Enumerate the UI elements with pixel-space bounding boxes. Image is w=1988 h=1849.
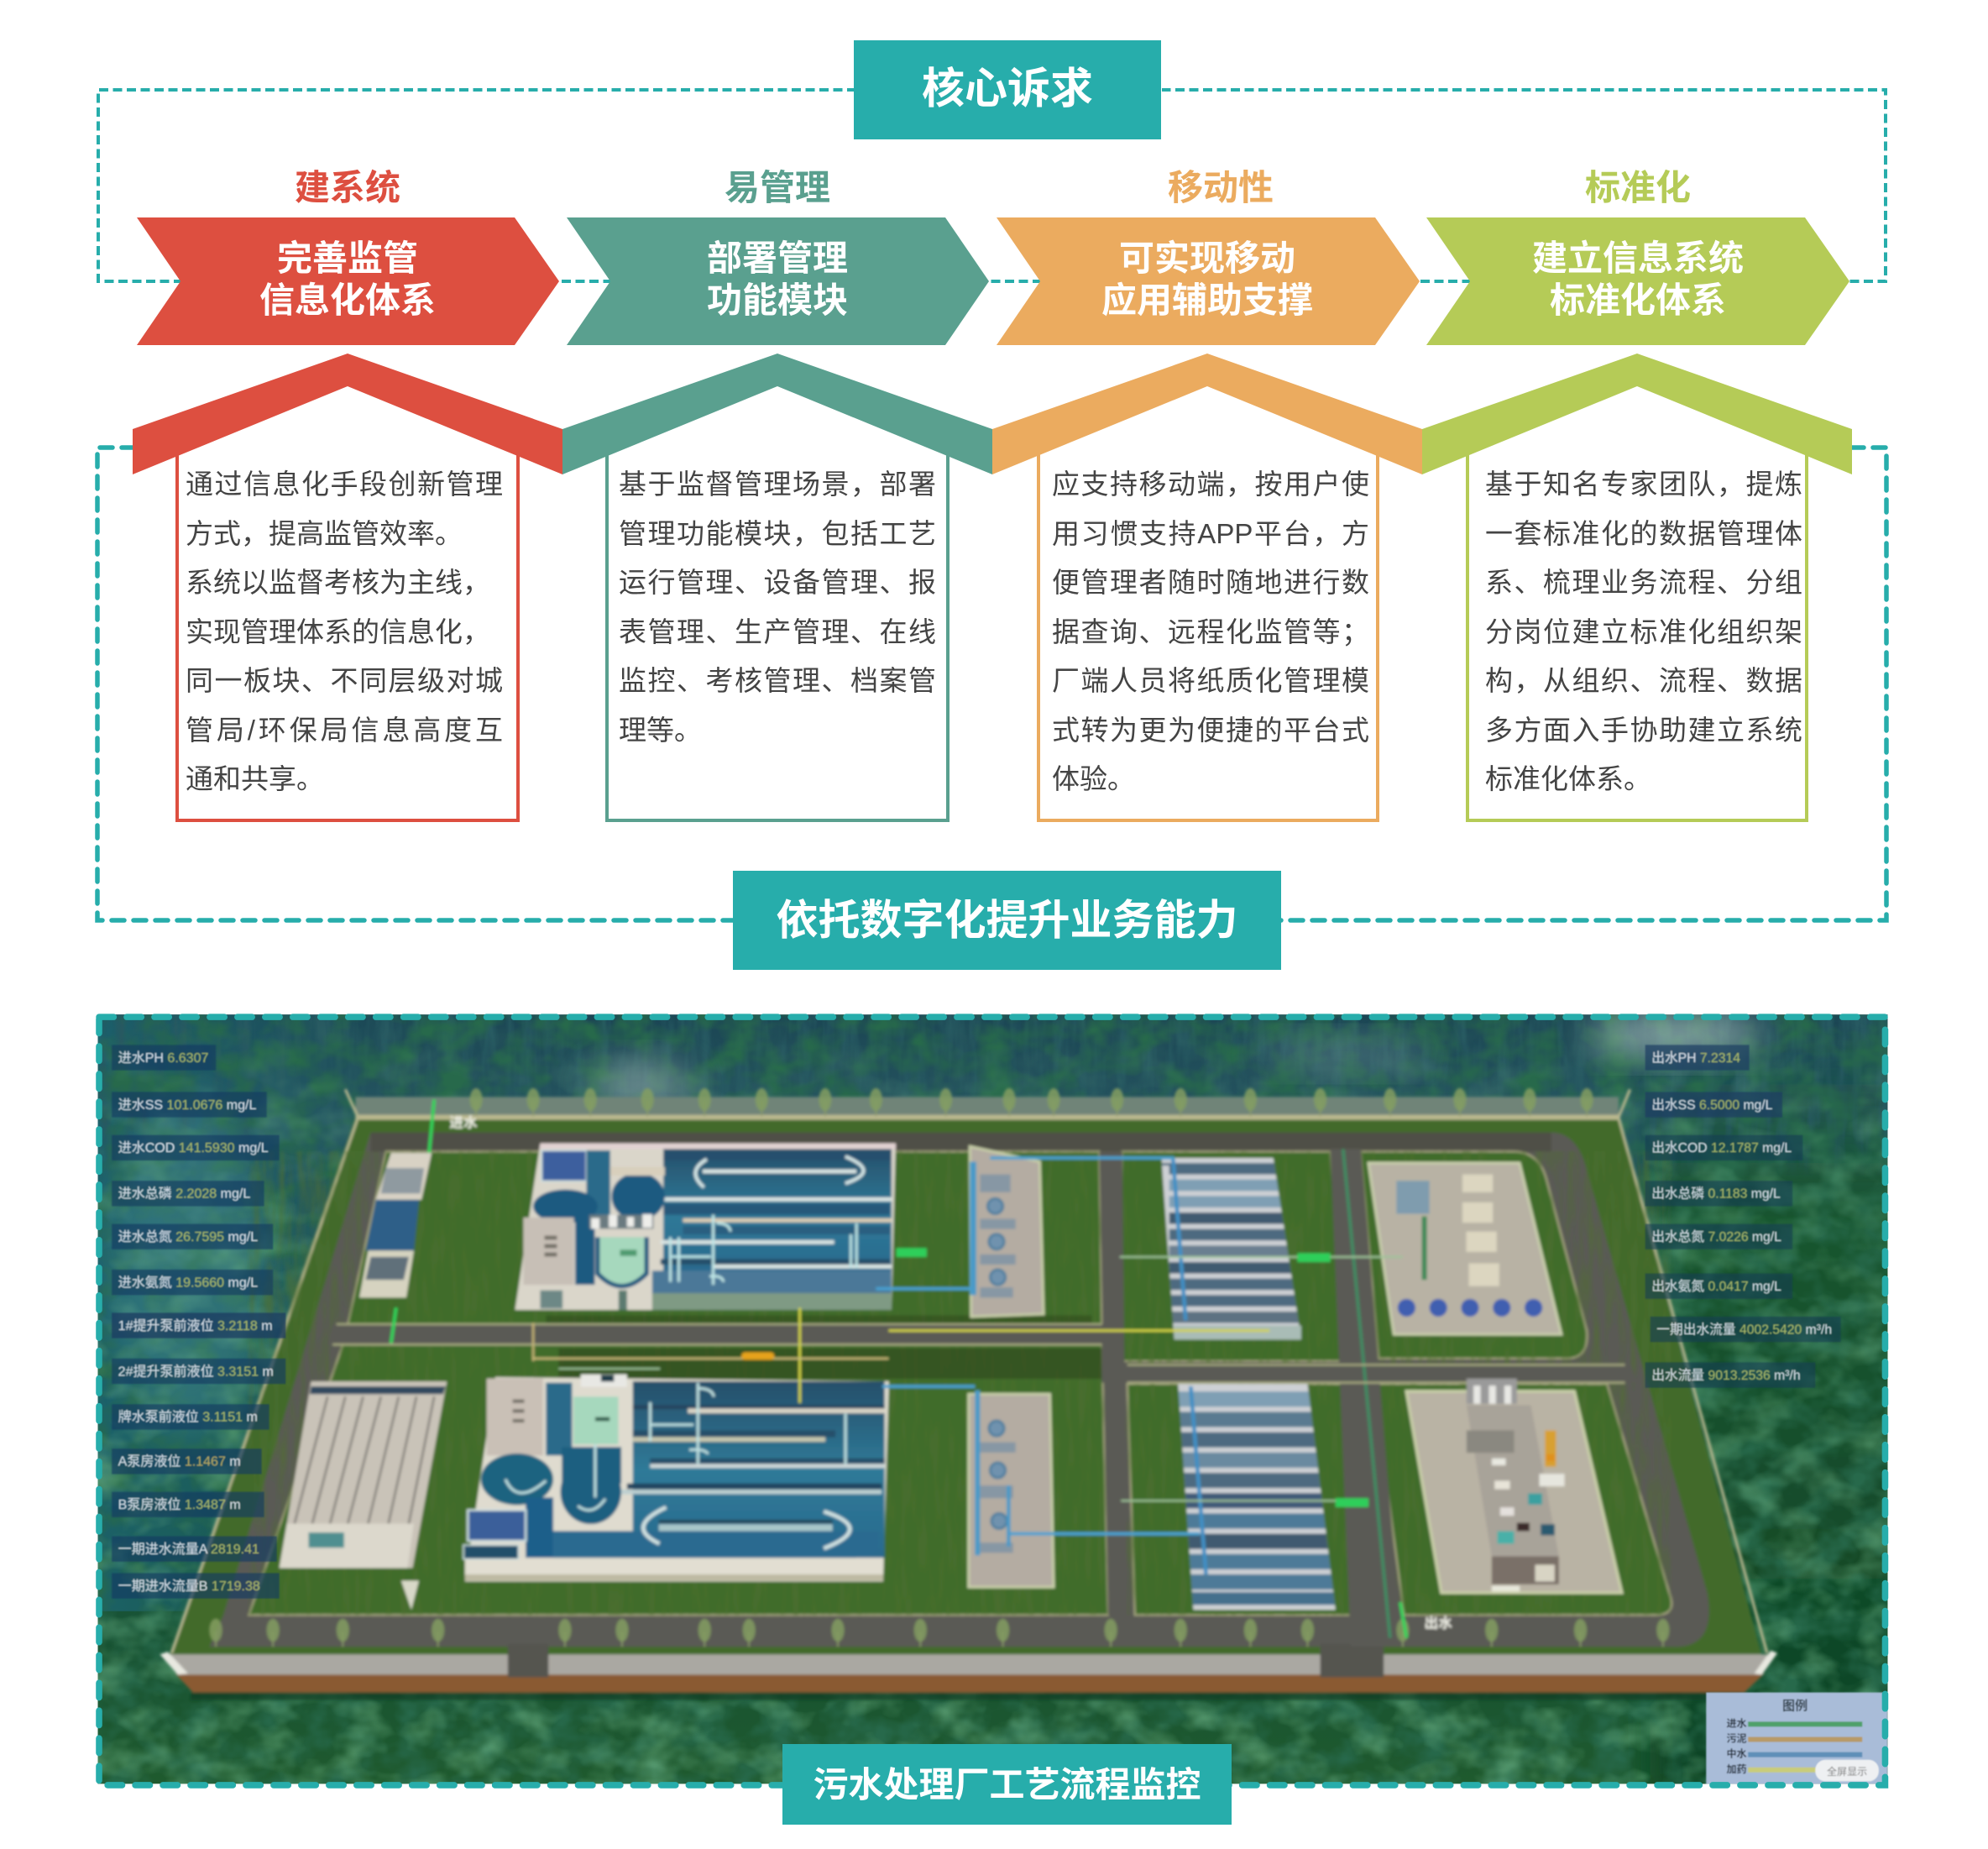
chevron text: green: 功能模块 [707,280,848,320]
upper aeration tank [515,1144,896,1310]
text block: mobility: 据查询、远程化监管等； [1052,616,1369,647]
text block: easy management: 表管理、生产管理、在线 [619,616,936,647]
left sensor readings: 进水SS 101.0676 mg/L [118,1097,257,1113]
chevron text: lime: 建立信息系统 [1532,238,1744,278]
text block: build system: 实现管理体系的信息化， [186,616,490,647]
text block: easy management: 监控、考核管理、档案管 [619,665,936,696]
text block: standardization: 一套标准化的数据管理体 [1485,517,1802,549]
lower sedimentation tank [1174,1384,1339,1610]
orange flow arrow [741,1352,774,1359]
wastewater plant site [160,1088,1777,1700]
text block: mobility: 应支持移动端，按用户使 [1052,469,1369,500]
text block: standardization: 分岗位建立标准化组织架 [1485,616,1802,647]
panel: mobility box [1037,445,1379,822]
chevron: green [567,217,989,345]
left sensor readings: A泵房液位 1.1467 m [118,1454,241,1469]
roof: red [133,354,562,474]
text block: easy management [619,469,936,746]
legend: 图例 [1782,1700,1808,1714]
photo dashed border [99,1017,1885,1785]
chevron: orange [997,217,1420,345]
text block: mobility [1052,469,1369,794]
left sensor readings: 一期进水流量A 2819.41 [118,1542,259,1557]
legend: 污泥 [1726,1732,1747,1745]
capability dashed frame [95,445,1889,923]
left sensor readings: 进水PH 6.6307 [118,1050,208,1066]
chevron text: green: 部署管理 [707,238,848,278]
chevron text: orange: 可实现移动 [1119,238,1295,278]
chevron text: green [707,238,848,320]
lower process block [1406,1379,1622,1593]
core demands dashed frame [97,88,1887,283]
panel: standardization box [1466,445,1808,822]
roof: lime [1422,354,1852,474]
chevron text: lime [1532,238,1744,320]
text block: build system: 通过信息化手段创新管理 [186,469,503,500]
upper equipment strip [970,1146,1044,1317]
legend: 加药 [1726,1763,1747,1775]
road network [210,1133,1709,1647]
right sensor readings: 出水SS 6.5000 mg/L [1651,1097,1773,1113]
right sensor readings: 出水流量 9013.2536 m³/h [1651,1368,1801,1383]
panel: build system box [175,445,520,822]
left sensor readings: 牌水泵前液位 3.1151 m [118,1410,258,1425]
text block: standardization: 多方面入手协助建立系统 [1485,714,1802,746]
right sensor readings: 一期出水流量 4002.5420 m³/h [1656,1322,1832,1337]
text block: standardization: 基于知名专家团队，提炼 [1485,469,1802,500]
text block: build system: 同一板块、不同层级对城 [186,665,503,696]
banner: digital capability: 依托数字化提升业务能力 [776,897,1237,944]
left sensor readings [112,1045,285,1599]
banner: process monitoring caption [782,1744,1232,1825]
left sensor readings: 1#提升泵前液位 3.2118 m [118,1318,273,1333]
text block: standardization: 标准化体系。 [1485,763,1651,794]
legend: 全屏显示 [1827,1765,1867,1778]
inflow label: 进水 [449,1115,478,1131]
chevron text: lime: 标准化体系 [1550,280,1726,320]
small pretreatment buildings [359,1153,432,1297]
chevron text: red: 信息化体系 [259,280,436,320]
chevron text: orange [1101,238,1313,320]
chevron text: red [259,238,436,320]
process monitoring photo panel [96,1014,1889,1789]
ground [169,1118,1762,1657]
grass shading [248,1151,1671,1615]
banner: process monitoring caption: 污水处理厂工艺流程监控 [813,1765,1201,1804]
left sensor readings: 进水COD 141.5930 mg/L [118,1140,269,1155]
right sensor readings: 出水氨氮 0.0417 mg/L [1651,1279,1781,1294]
text block: build system: 管局/环保局信息高度互 [186,714,503,746]
roof: orange [992,354,1422,474]
upper sedimentation tank [1159,1155,1304,1342]
green flow markers [897,1248,1368,1507]
text block: easy management: 基于监督管理场景，部署 [619,469,936,500]
right sensor readings [1645,1045,1841,1388]
title: core demands [854,40,1161,139]
chevrons and roof shapes [133,217,1852,474]
left sensor readings: B泵房液位 1.3487 m [118,1497,241,1512]
forest background [97,1014,1943,1803]
legend: 进水 [1726,1716,1747,1729]
grass cells [248,1151,1671,1615]
outflow label: 出水 [1425,1615,1452,1631]
text block: mobility: 体验。 [1052,763,1135,794]
text block: standardization: 系、梳理业务流程、分组 [1485,567,1802,598]
banner: digital capability [733,871,1281,970]
right sensor readings: 出水COD 12.1787 mg/L [1651,1140,1792,1155]
text block: build system: 方式，提高监管效率。 [186,517,463,549]
pipelines [391,1099,1406,1638]
text block: build system: 通和共享。 [186,763,324,794]
chevron text: red: 完善监管 [277,238,418,278]
text block: mobility: 便管理者随时随地进行数 [1052,567,1369,598]
chevron: lime [1426,217,1849,345]
title: core demands: 核心诉求 [922,65,1093,113]
chevron: red [137,217,559,345]
text block: build system: 系统以监督考核为主线， [186,567,490,598]
right sensor readings: 出水PH 7.2314 [1651,1050,1740,1066]
connecting roads [1100,1345,1105,1365]
fence back wall [355,1097,1619,1118]
text block: standardization [1485,469,1802,794]
left sensor readings: 进水氨氮 19.5660 mg/L [118,1275,258,1290]
upper power block [1368,1163,1562,1334]
left sensor readings: 进水总磷 2.2028 mg/L [118,1186,250,1202]
lower left warehouse [280,1381,447,1610]
left sensor readings: 2#提升泵前液位 3.3151 m [118,1364,274,1379]
text block: easy management: 管理功能模块，包括工艺 [619,517,936,549]
perimeter trees [210,1088,1669,1647]
text block: easy management: 理等。 [619,714,702,746]
text block: build system [186,469,503,794]
legend: 中水 [1726,1747,1747,1760]
heading: build system: 建系统 [295,168,400,207]
roof: green [562,354,992,474]
heading: mobility: 移动性 [1168,168,1274,207]
right sensor readings: 出水总磷 0.1183 mg/L [1651,1186,1781,1202]
left sensor readings: 一期进水流量B 1719.38 [118,1579,260,1594]
right sensor readings: 出水总氮 7.0226 mg/L [1651,1229,1781,1244]
front fence [160,1654,1771,1674]
text block: mobility: 用习惯支持APP平台，方 [1052,517,1369,549]
heading: standardization: 标准化 [1585,168,1691,207]
left sensor readings: 进水总氮 26.7595 mg/L [118,1229,258,1244]
lower aeration tank [463,1375,889,1581]
heading: easy management: 易管理 [725,168,830,207]
text block: standardization: 构，从组织、流程、数据 [1485,665,1802,696]
brown embankment [175,1674,1765,1693]
lower equipment strip [969,1391,1054,1587]
text block: mobility: 厂端人员将纸质化管理模 [1052,665,1369,696]
chevron text: orange: 应用辅助支撑 [1101,280,1313,320]
text block: mobility: 式转为更为便捷的平台式 [1052,714,1369,746]
panel: easy management box [605,445,950,822]
legend [1706,1693,1887,1788]
text block: easy management: 运行管理、设备管理、报 [619,567,936,598]
